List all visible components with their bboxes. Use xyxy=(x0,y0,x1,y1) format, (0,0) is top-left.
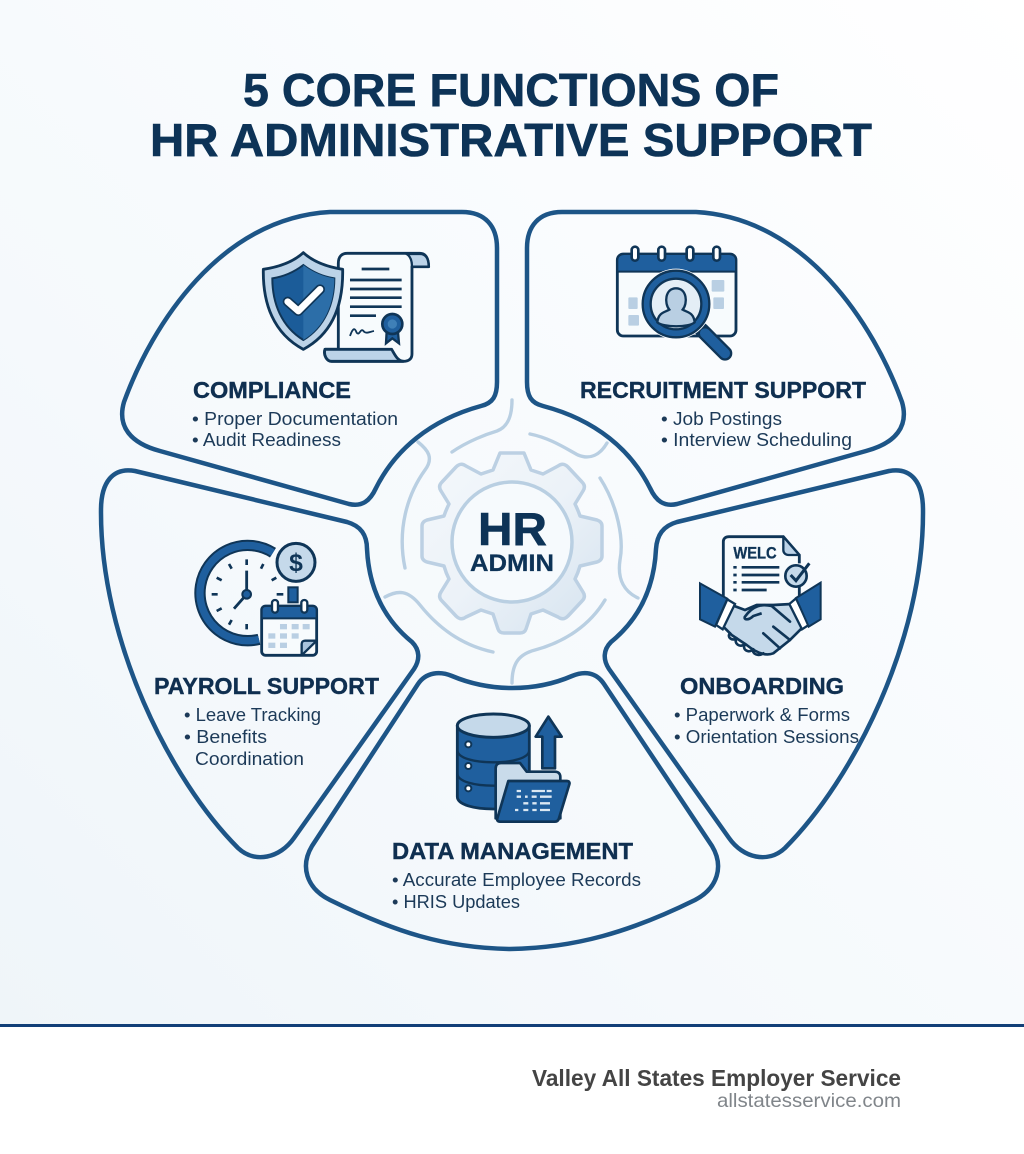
icon: shield and certificate xyxy=(263,253,429,361)
bullets: compliance: • Audit Readiness xyxy=(192,430,341,450)
icon: database, arrow and folder xyxy=(457,714,570,822)
heading: recruitment support: RECRUITMENT SUPPORT xyxy=(580,377,866,403)
bullets: payroll support: • Benefits xyxy=(184,727,267,747)
bullets: payroll support: • Leave Tracking xyxy=(184,705,321,725)
title: HR ADMINISTRATIVE SUPPORT xyxy=(150,114,872,166)
panel: onboarding xyxy=(605,470,923,857)
bullets: data management xyxy=(392,870,641,912)
icon: calendar and magnifier xyxy=(617,247,736,353)
center label: ADMIN xyxy=(470,550,554,577)
panel: payroll support xyxy=(101,470,418,857)
bullets: payroll support xyxy=(184,705,321,769)
bullets: onboarding: • Orientation Sessions xyxy=(674,727,859,747)
icon: clock, dollar and calendar xyxy=(200,543,317,655)
bullets: payroll support: Coordination xyxy=(195,749,304,769)
center gear: HR Admin xyxy=(422,453,602,633)
title xyxy=(150,64,872,166)
bullets: data management: • Accurate Employee Records xyxy=(392,870,641,890)
panel: data management xyxy=(306,673,718,949)
heading: data management: DATA MANAGEMENT xyxy=(392,838,633,864)
center label xyxy=(470,503,554,577)
footer brand: allstatesservice.com xyxy=(717,1090,901,1112)
title: 5 CORE FUNCTIONS OF xyxy=(243,64,779,116)
bullets: onboarding: • Paperwork & Forms xyxy=(674,705,850,725)
panel: recruitment support xyxy=(527,212,904,505)
bullets: data management: • HRIS Updates xyxy=(392,892,520,912)
bullets: recruitment support: • Interview Scheduling xyxy=(661,430,852,450)
center label: HR xyxy=(478,503,547,555)
footer brand xyxy=(532,1065,901,1112)
dollar sign: $ xyxy=(289,550,303,577)
panel: compliance xyxy=(122,212,497,505)
heading: payroll support: PAYROLL SUPPORT xyxy=(154,673,379,699)
document word: WELC xyxy=(733,543,777,562)
heading: compliance: COMPLIANCE xyxy=(193,377,351,403)
bullets: recruitment support: • Job Postings xyxy=(661,409,782,429)
footer brand: Valley All States Employer Service xyxy=(532,1065,901,1091)
icon: welcome document and handshake xyxy=(700,537,821,655)
bullets: onboarding xyxy=(674,705,859,747)
bullets: compliance xyxy=(192,409,398,450)
heading: onboarding: ONBOARDING xyxy=(680,673,844,699)
bullets: recruitment support xyxy=(661,409,852,450)
bullets: compliance: • Proper Documentation xyxy=(192,409,398,429)
central connector swoops xyxy=(385,400,638,683)
